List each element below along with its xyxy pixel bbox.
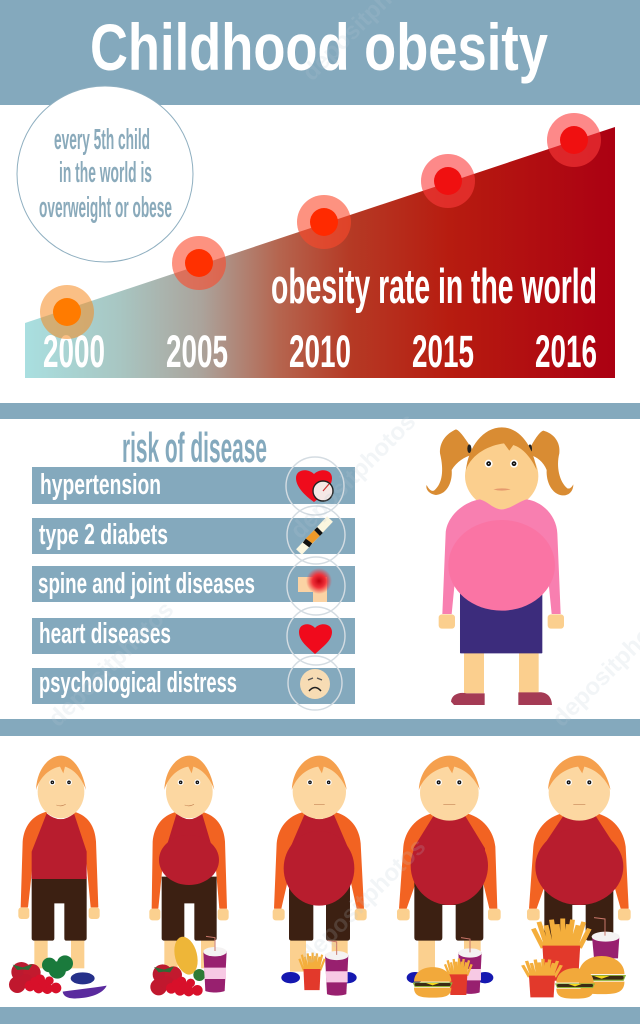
shorts	[162, 877, 217, 941]
row: type 2 diabets: type 2 diabets	[39, 519, 168, 551]
illustration: boy 5 with burgers, fries, soda	[523, 756, 631, 999]
food: soda, fries, burger	[413, 938, 482, 998]
food: corn, tomatoes, soda	[150, 934, 227, 996]
legs	[464, 652, 484, 693]
head	[164, 756, 214, 818]
head	[419, 756, 480, 821]
watermark: depositphotos	[43, 596, 179, 732]
illustration: boy 1 with vegetables	[9, 756, 107, 998]
callout: every 5th child: overweight or obese	[39, 192, 172, 224]
hair	[466, 427, 537, 470]
callout: every 5th child: in the world is	[59, 157, 152, 189]
year labels: 2005	[166, 326, 228, 377]
callout: every 5th child	[17, 86, 193, 262]
row: psychological distress: psychological distress	[39, 667, 237, 699]
text: risk of disease	[122, 424, 267, 471]
hands	[397, 909, 410, 920]
skirt	[460, 590, 542, 653]
year labels: 2010	[289, 326, 351, 377]
head	[548, 756, 611, 821]
food: soda, fries, burgers	[523, 918, 626, 999]
blouse	[442, 499, 561, 614]
face	[465, 443, 538, 509]
legs	[290, 938, 306, 972]
hands	[527, 909, 540, 920]
shorts	[414, 878, 483, 941]
shirt and belly	[290, 813, 348, 862]
legs	[164, 938, 178, 968]
head	[292, 756, 347, 819]
row: heart diseases	[32, 607, 355, 665]
year labels: 2016	[535, 326, 597, 377]
bottom band	[0, 1007, 640, 1024]
sleeves	[152, 812, 183, 909]
header band	[0, 0, 640, 105]
row: psychological distress	[32, 656, 355, 710]
belly	[448, 520, 555, 611]
hands	[18, 907, 29, 919]
divider band top	[0, 403, 640, 419]
watermark: depositphotos	[295, 833, 431, 969]
row: spine and joint diseases: spine and joint diseases	[38, 568, 255, 600]
legs	[418, 938, 435, 972]
illustration: boy 4 with burger, fries, soda	[397, 756, 501, 998]
illustration: boy 2 with corn and soda	[149, 756, 229, 996]
illustration: boy 3 with fries and soda	[273, 756, 367, 996]
shirt	[32, 813, 87, 879]
head	[36, 756, 86, 818]
year labels: 2000	[43, 326, 105, 377]
food: fries and soda	[299, 941, 348, 996]
sleeves	[274, 812, 310, 909]
data points	[40, 113, 601, 339]
sleeves	[399, 813, 443, 909]
shirt and belly	[542, 813, 617, 862]
shoes	[407, 972, 423, 983]
row: hypertension: hypertension	[40, 469, 161, 501]
row: hypertension	[32, 457, 355, 515]
shoes	[451, 693, 485, 705]
divider band middle	[0, 719, 640, 736]
shirt and belly	[165, 813, 213, 875]
panel: disease list	[32, 457, 355, 710]
hands	[149, 909, 160, 920]
row: heart diseases: heart diseases	[39, 618, 171, 650]
pigtails	[426, 429, 472, 495]
watermark: depositphotos	[285, 408, 421, 544]
chart: obesity rate in the world	[25, 113, 615, 378]
sleeves	[529, 813, 573, 909]
shorts	[289, 878, 350, 941]
food: vegetables	[9, 955, 107, 998]
shoes	[281, 972, 300, 983]
illustration: girl	[426, 427, 573, 705]
callout: every 5th child: every 5th child	[54, 124, 150, 156]
row: type 2 diabets	[32, 506, 355, 564]
hands	[439, 614, 455, 629]
hands	[273, 909, 285, 920]
shirt and belly	[413, 813, 485, 862]
shorts	[544, 885, 613, 941]
year labels	[43, 326, 597, 377]
sleeves	[21, 812, 53, 907]
row: spine and joint diseases	[32, 557, 355, 615]
shorts	[32, 877, 87, 941]
year labels: 2015	[412, 326, 474, 377]
legs	[34, 938, 48, 968]
rising area	[25, 127, 615, 378]
